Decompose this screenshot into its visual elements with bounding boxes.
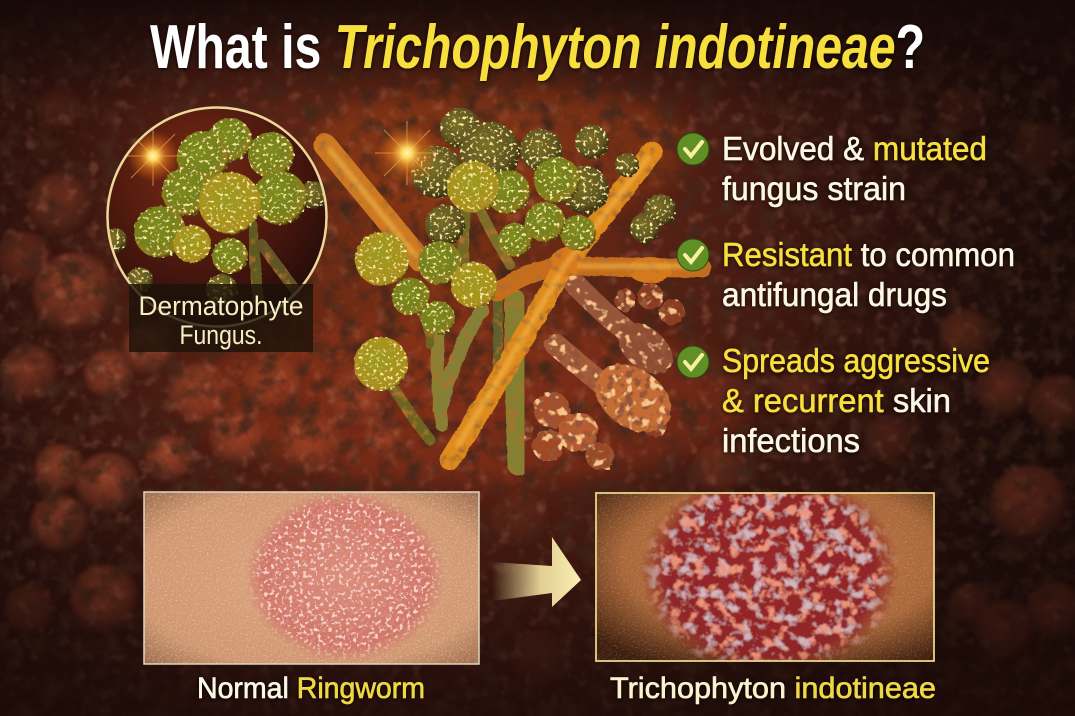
fact 3: spreading infections [677, 342, 990, 459]
photo: normal ringworm [144, 490, 479, 664]
caption: Trichophyton indotineae: Trichophyton indotineae [610, 672, 936, 705]
ground clumps and club-shaped macroconidia [507, 283, 685, 470]
icon: check 1 [677, 133, 709, 165]
dermatophyte label [129, 284, 313, 352]
central fungus illustration [325, 108, 702, 470]
dermatophyte label: Fungus. [180, 320, 262, 350]
photo: Trichophyton indotineae infection [595, 492, 935, 662]
hyphae highlights [330, 150, 690, 445]
fact 3: spreading infections: & recurrent skin [722, 382, 951, 419]
arrow: progression [492, 537, 581, 607]
olive stalks [392, 190, 518, 465]
magnified circle: dermatophyte fungus [103, 108, 327, 352]
fact 1: evolved strain [677, 130, 987, 207]
icon: check 2 [677, 239, 709, 271]
fact 3: spreading infections: Spreads aggressive [722, 342, 990, 379]
fact 3: spreading infections: infections [722, 422, 860, 459]
glowing spark [375, 121, 439, 185]
caption: normal ringworm: Normal Ringworm [197, 672, 425, 705]
spore balls [354, 108, 676, 391]
fact 1: evolved strain: Evolved & mutated [722, 130, 987, 167]
icon: check 3 [677, 346, 709, 378]
fact 1: evolved strain: fungus strain [722, 170, 906, 207]
fact 2: drug resistance: antifungal drugs [722, 276, 947, 313]
key facts list [677, 130, 1015, 459]
title: What is Trichophyton indotineae? [150, 13, 925, 82]
dermatophyte label: Dermatophyte [138, 291, 304, 321]
fact 2: drug resistance [677, 236, 1015, 313]
fact 2: drug resistance: Resistant to common [722, 236, 1015, 273]
orange hyphae [325, 145, 702, 460]
